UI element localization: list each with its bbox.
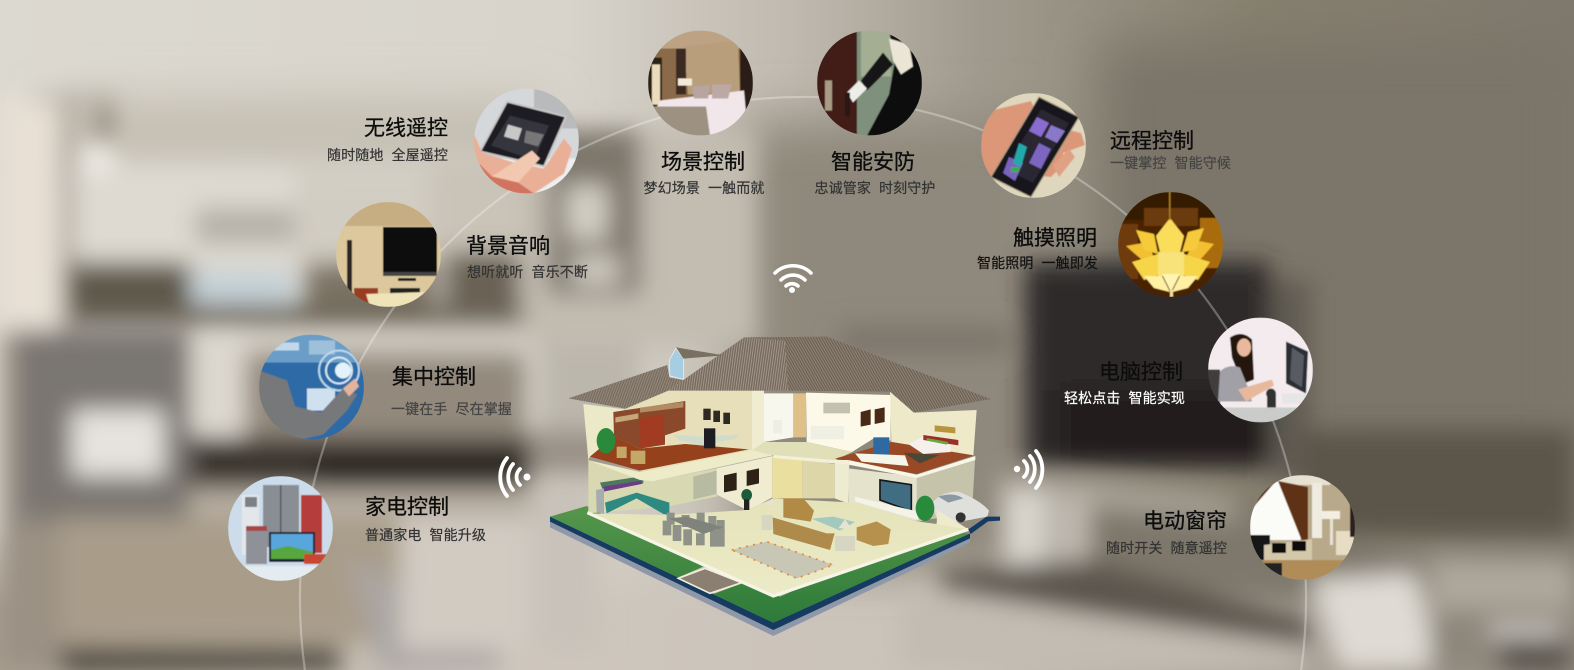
- subtitle: 忠诚管家 时刻守护: [815, 180, 935, 196]
- subtitle: 随时随地 全屋遥控: [327, 147, 448, 163]
- photo: touch interface: [259, 334, 364, 440]
- upper floors: [590, 437, 749, 471]
- title: 触摸照明: [1013, 227, 1097, 250]
- item: 家电控制: [228, 476, 486, 581]
- item: 电动窗帘: [1106, 475, 1355, 580]
- title: 集中控制: [392, 366, 476, 389]
- dining set: [663, 513, 725, 547]
- item: 无线遥控: [327, 88, 579, 194]
- bookcase: [613, 401, 685, 449]
- subtitle: 轻松点击 智能实现: [1064, 390, 1185, 406]
- subtitle: 普通家电 智能升级: [365, 527, 486, 543]
- item: 集中控制: [259, 334, 512, 440]
- photo: smartphone in hand: [981, 93, 1086, 198]
- photo: door lock: [817, 30, 922, 136]
- subtitle: 想听就听 音乐不断: [467, 264, 588, 280]
- photo: lotus lamp: [1118, 192, 1223, 297]
- upper walls: [583, 404, 625, 460]
- item: 背景音响: [336, 202, 588, 307]
- ground floor: [588, 498, 968, 597]
- path: [678, 568, 742, 593]
- ground floor walls: [588, 460, 717, 513]
- title: 场景控制: [661, 151, 745, 174]
- bathroom fixtures: [773, 420, 782, 433]
- house cutaway illustration: [550, 337, 1000, 636]
- wifi icon: top: [775, 266, 811, 293]
- item: 电脑控制: [1064, 318, 1313, 422]
- plants: [597, 428, 615, 453]
- subtitle: 梦幻场景 一触而就: [644, 180, 764, 196]
- item: 智能安防: [815, 30, 935, 196]
- tv wall unit: [880, 480, 911, 511]
- item: 远程控制: [981, 93, 1231, 198]
- wifi icon: left: [500, 458, 530, 496]
- title: 远程控制: [1110, 130, 1194, 153]
- lawns: [550, 506, 969, 623]
- study furniture: [673, 435, 739, 445]
- subtitle: 随时开关 随意遥控: [1106, 540, 1227, 556]
- item: 触摸照明: [977, 192, 1223, 297]
- photo: curtains: [1250, 475, 1355, 580]
- car: [932, 492, 989, 522]
- photo: TV and speakers: [336, 202, 441, 307]
- kitchen: [605, 493, 669, 515]
- roof: [568, 365, 683, 409]
- bedroom: [908, 437, 951, 454]
- wifi icon: right: [1014, 451, 1042, 488]
- underfloor heating mat: [732, 542, 833, 578]
- dormer window: [669, 348, 683, 379]
- connecting arc: [300, 97, 1306, 670]
- photo: home appliances: [228, 476, 333, 581]
- base slab: [550, 517, 970, 636]
- photo: bedroom: [648, 30, 753, 136]
- subtitle: 智能照明 一触即发: [977, 255, 1098, 271]
- title: 电动窗帘: [1143, 510, 1227, 533]
- title: 电脑控制: [1099, 361, 1183, 384]
- title: 背景音响: [466, 235, 550, 258]
- photo: tablet remote: [474, 88, 579, 194]
- subtitle: 一键在手 尽在掌握: [391, 401, 512, 417]
- title: 智能安防: [831, 151, 915, 174]
- sofa set: [783, 498, 814, 522]
- photo: woman at computer: [1208, 318, 1313, 422]
- wall art: [724, 473, 737, 492]
- corridor floor: [752, 442, 852, 461]
- subtitle: 一键掌控 智能守候: [1110, 155, 1231, 171]
- item: 场景控制: [644, 30, 764, 196]
- title: 无线遥控: [364, 117, 448, 140]
- title: 家电控制: [365, 496, 449, 519]
